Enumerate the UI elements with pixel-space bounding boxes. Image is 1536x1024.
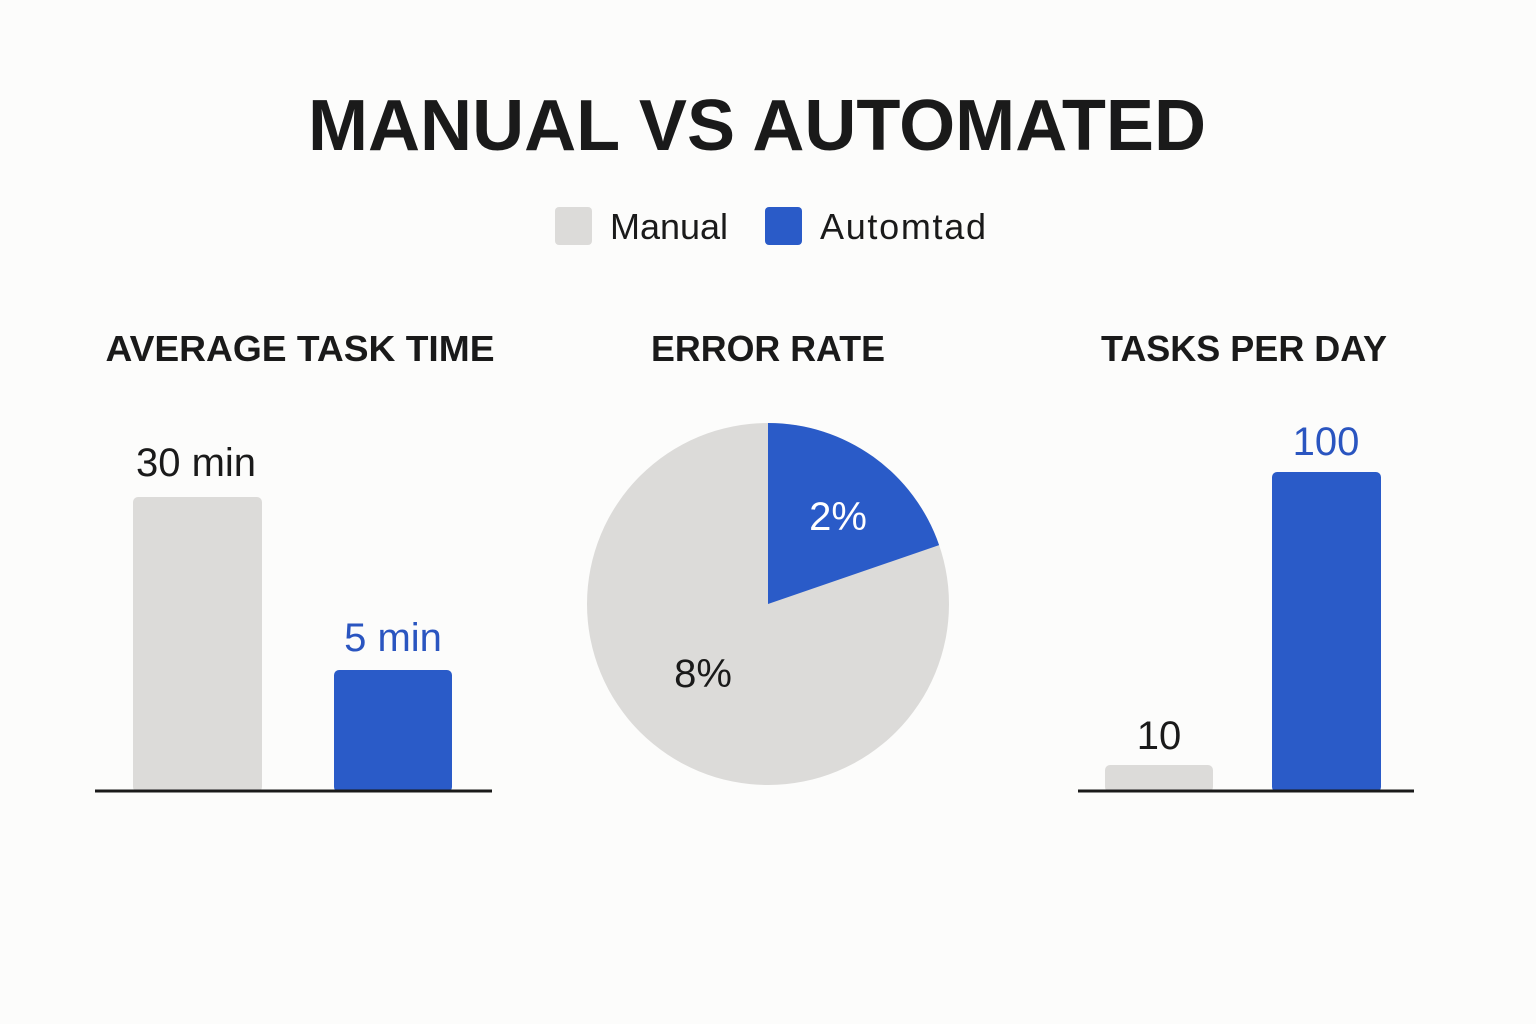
bar chart: tasks per day bbox=[1078, 420, 1414, 792]
bar chart: average task time bbox=[95, 441, 492, 792]
label: 100: 100 bbox=[1293, 420, 1359, 464]
slice: automated 2% bbox=[768, 423, 939, 604]
legend: manual label: Manual bbox=[610, 206, 728, 247]
bar: manual 30 min bbox=[133, 497, 262, 792]
label: 30 min: 30 min bbox=[136, 441, 256, 485]
pie chart: error rate bbox=[587, 423, 949, 785]
legend bbox=[555, 206, 986, 247]
label: 5 min: 5 min bbox=[344, 616, 442, 660]
bar: manual 10 bbox=[1105, 765, 1213, 792]
bar: automated 5 min bbox=[334, 670, 452, 792]
heading: error rate: ERROR RATE bbox=[651, 328, 885, 369]
legend: automated swatch bbox=[765, 207, 802, 245]
heading: average task time: AVERAGE TASK TIME bbox=[106, 328, 494, 369]
label: 8%: 8% bbox=[674, 652, 732, 696]
legend: manual swatch bbox=[555, 207, 592, 245]
heading: tasks per day: TASKS PER DAY bbox=[1101, 328, 1387, 369]
title: MANUAL VS AUTOMATED bbox=[308, 86, 1206, 166]
legend: automated label: Automtad bbox=[820, 206, 986, 247]
label: 10: 10 bbox=[1137, 714, 1181, 758]
label: 2%: 2% bbox=[809, 495, 867, 539]
bar: automated 100 bbox=[1272, 472, 1381, 792]
